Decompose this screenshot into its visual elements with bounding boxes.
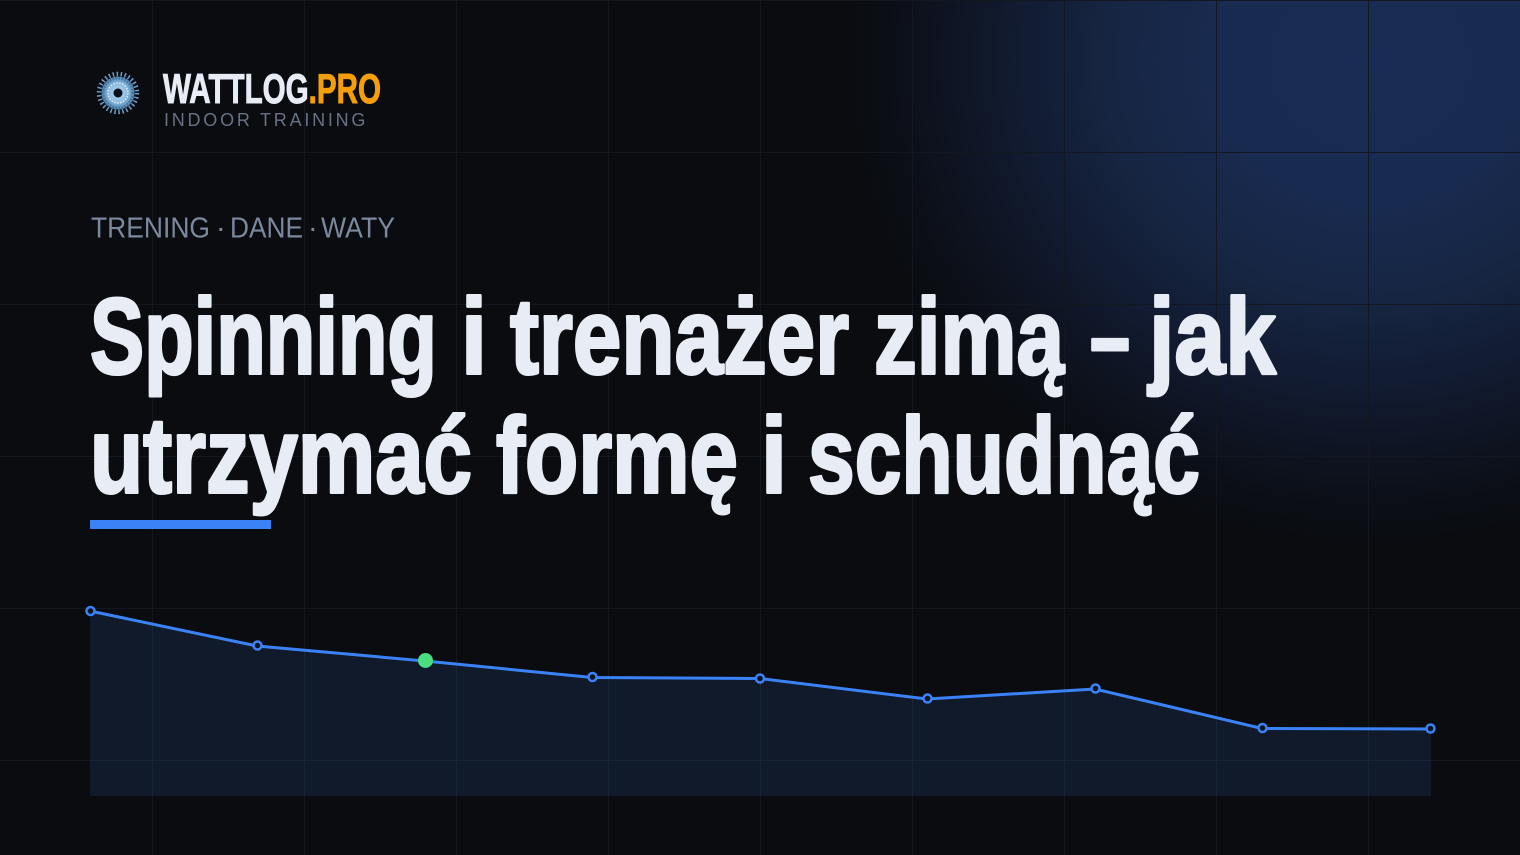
chart area fill: [90, 611, 1431, 796]
chart highlighted point: [418, 653, 433, 668]
title: utrzymać: [90, 394, 472, 516]
title: Spinning: [90, 276, 437, 396]
line chart: [86, 607, 1434, 796]
title underline accent: [90, 520, 271, 529]
eyebrow: [91, 212, 395, 244]
title: i: [461, 276, 487, 396]
title: zimą: [874, 276, 1065, 396]
title: trenażer: [510, 276, 849, 396]
title: jak: [1147, 276, 1277, 396]
title: [90, 276, 1277, 516]
eyebrow: DANE: [230, 212, 303, 244]
chart data points: [86, 607, 1434, 732]
logo tagline: INDOOR TRAINING: [164, 110, 369, 130]
title: –: [1090, 276, 1130, 396]
icon: bicycle cassette: [99, 74, 137, 112]
eyebrow: ·: [216, 212, 226, 244]
title: i: [761, 394, 787, 516]
title: schudnąć: [808, 394, 1200, 516]
logo: [99, 65, 381, 130]
eyebrow: WATY: [321, 212, 395, 244]
logo wordmark: WATTLOG.PRO: [163, 65, 381, 112]
chart line: [90, 611, 1431, 729]
background glow: [800, 0, 1520, 600]
eyebrow: ·: [308, 212, 318, 244]
title: formę: [496, 394, 738, 516]
eyebrow: TRENING: [91, 212, 210, 244]
